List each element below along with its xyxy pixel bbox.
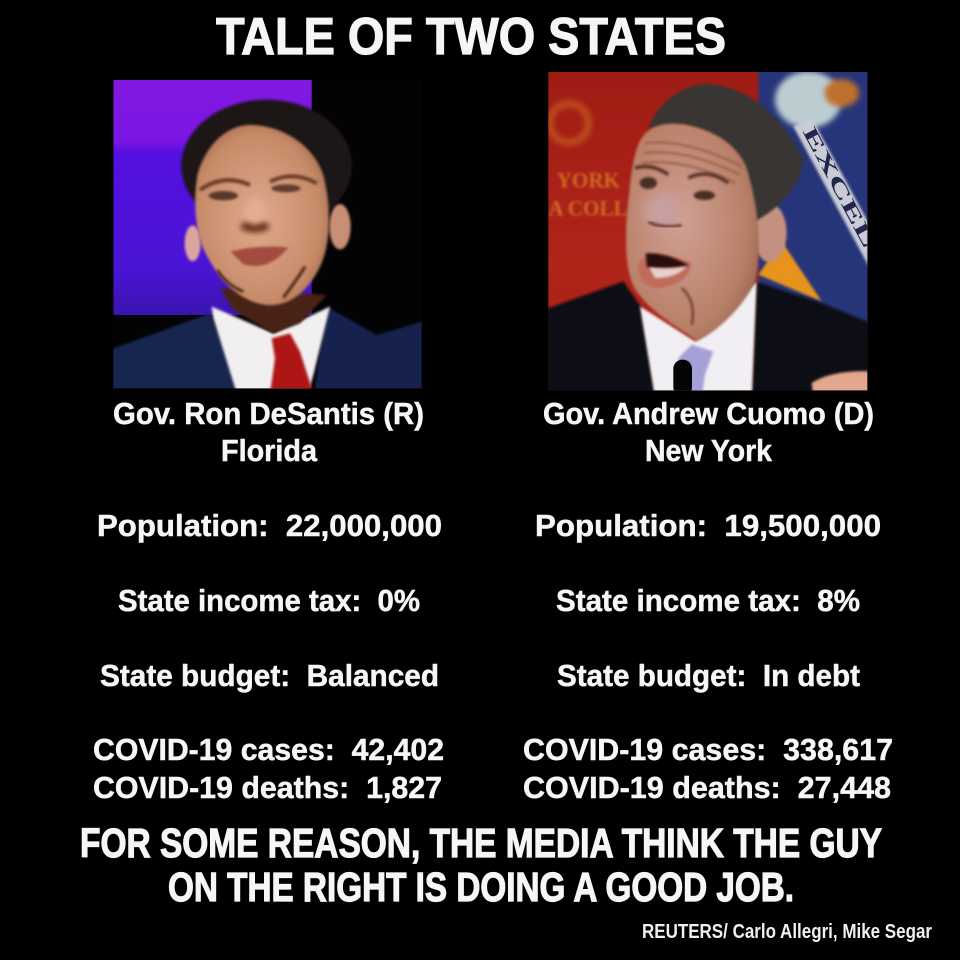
photo: Andrew Cuomo: [548, 72, 868, 390]
right column: population: Population: 19,500,000: [535, 508, 881, 543]
left column: governor name: Florida: [221, 433, 318, 468]
left column: governor name: [113, 396, 424, 468]
left column: income tax: State income tax: 0%: [118, 583, 420, 618]
right column: governor name: New York: [645, 433, 773, 468]
left column: budget: State budget: Balanced: [100, 658, 439, 693]
right column: covid figures: [523, 732, 893, 805]
left column: governor name: Gov. Ron DeSantis (R): [113, 396, 424, 431]
right column: governor name: [543, 396, 874, 468]
right column: covid figures: COVID-19 cases: 338,617: [523, 732, 893, 767]
photo: Andrew Cuomo: EXCEL: [798, 123, 880, 251]
right column: income tax: State income tax: 8%: [556, 583, 860, 618]
closing statement: ON THE RIGHT IS DOING A GOOD JOB.: [168, 864, 794, 910]
photo: Ron DeSantis: [113, 80, 422, 388]
closing statement: [80, 820, 882, 910]
right column: covid figures: COVID-19 deaths: 27,448: [523, 770, 891, 805]
right column: governor name: Gov. Andrew Cuomo (D): [543, 396, 874, 431]
right column: budget: State budget: In debt: [557, 658, 860, 693]
left column: covid figures: COVID-19 deaths: 1,827: [93, 770, 442, 805]
photo: Andrew Cuomo: A COLL: [548, 195, 628, 220]
left column: covid figures: COVID-19 cases: 42,402: [93, 732, 444, 767]
title: TALE OF TWO STATES: [216, 8, 726, 66]
left column: covid figures: [93, 732, 444, 805]
banner lettering: YORK: [557, 167, 620, 192]
left column: population: Population: 22,000,000: [97, 508, 442, 543]
